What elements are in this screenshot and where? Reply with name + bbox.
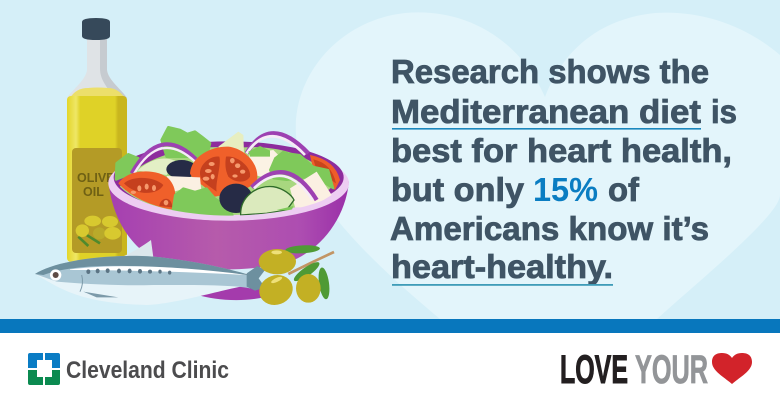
gill line (80, 275, 83, 292)
bottle label text line 2: OIL (83, 185, 104, 199)
tomato center (190, 147, 257, 197)
line 2 highlighted phrase: Mediterranean diet (391, 93, 701, 130)
salad back layer (116, 127, 340, 190)
tail (247, 266, 265, 291)
illustration: olive oil bottle (67, 18, 127, 262)
illustration: olives branch (255, 244, 334, 310)
lettuce front (173, 188, 233, 216)
dorsal fin (123, 240, 153, 257)
olive three (296, 274, 321, 303)
bottle label text: OLIVE (77, 171, 115, 185)
illustration: salad bowl (108, 127, 349, 300)
spots (86, 268, 171, 275)
bowl foot (198, 283, 267, 300)
line 4 start: but only (391, 171, 525, 208)
statistic: 15%: 15% (533, 171, 598, 208)
black olive front (219, 184, 253, 213)
icon: red heart (712, 353, 752, 384)
red onion front (252, 172, 317, 200)
olive two (255, 270, 297, 310)
cheese right (290, 172, 332, 207)
pectoral fin (83, 292, 118, 297)
background heart (296, 12, 780, 319)
background (0, 0, 780, 319)
line 4 end: of (608, 171, 640, 208)
headline text (390, 53, 737, 286)
Love Your wordmark: LOVE: LOVE (560, 348, 628, 392)
underline: heart-healthy (392, 284, 613, 286)
Love Your wordmark: YOUR: YOUR (635, 348, 708, 392)
branch (288, 252, 334, 274)
fish belly (35, 263, 250, 305)
line 2 end: is (711, 93, 737, 130)
bowl interior (114, 141, 344, 213)
blue band (0, 319, 780, 333)
underline: Mediterranean diet (392, 128, 701, 130)
footer background (0, 333, 780, 410)
olive one (259, 249, 296, 274)
illustration: sardine fish (35, 240, 265, 305)
bottle cap (82, 18, 110, 40)
bowl body (108, 180, 349, 269)
front rim highlight (109, 177, 348, 221)
cucumber front (241, 187, 294, 215)
fish back (35, 256, 250, 288)
eye (50, 269, 61, 281)
line 5: Americans know it’s (390, 210, 709, 247)
salad filling base (120, 147, 335, 215)
tomato left (118, 171, 175, 209)
feta cheese (167, 176, 202, 193)
Cleveland Clinic logo mark (28, 353, 60, 385)
white stripe (70, 266, 247, 275)
leaves (285, 244, 331, 300)
line 1: Research shows the (391, 53, 709, 90)
line 3: best for heart health, (391, 132, 732, 169)
line 6: heart-healthy. (391, 248, 613, 285)
bottle label olives (76, 216, 121, 246)
Cleveland Clinic wordmark: Cleveland Clinic (66, 357, 229, 384)
bowl rim (108, 146, 349, 221)
